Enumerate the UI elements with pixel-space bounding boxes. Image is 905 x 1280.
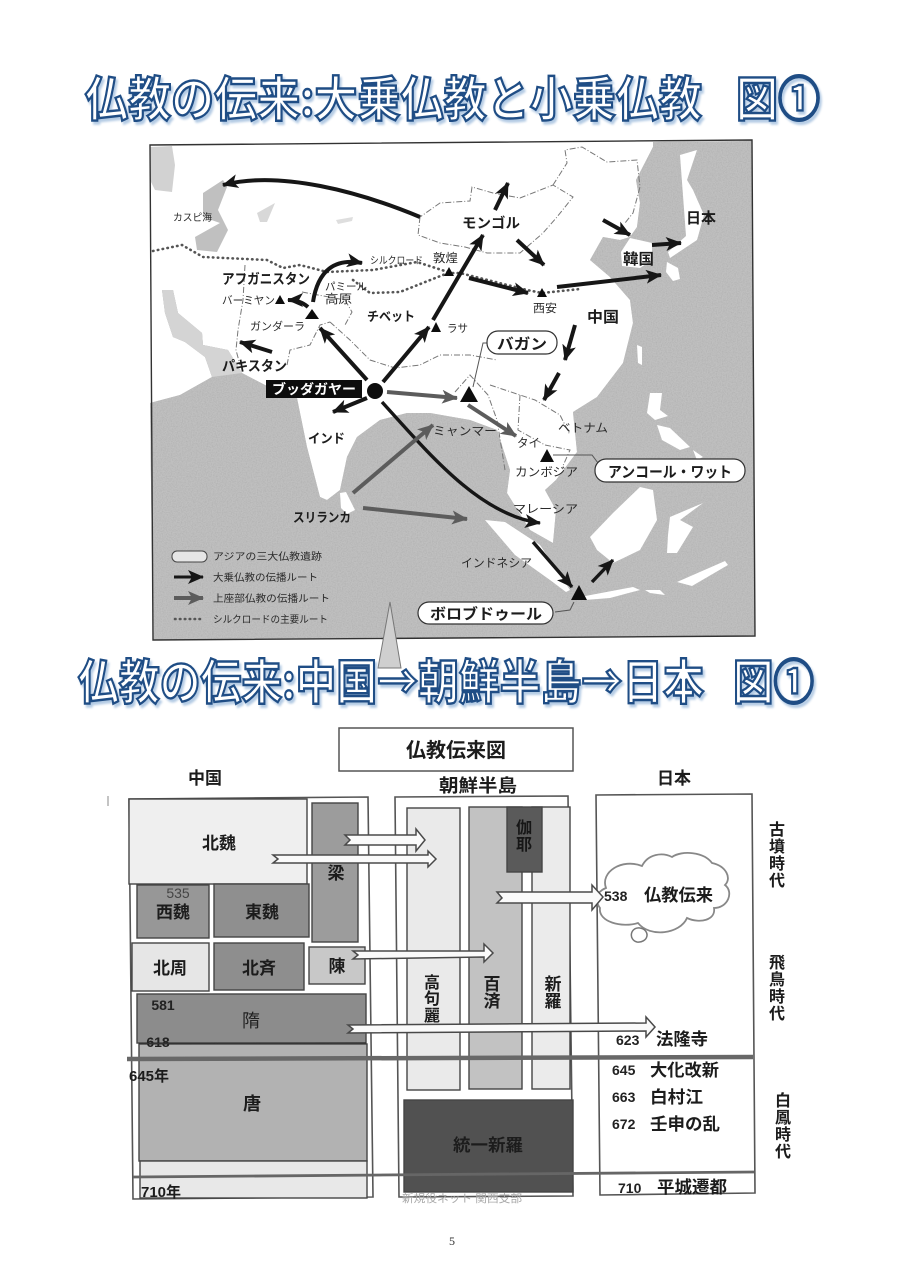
map: Bagan callout: バガン [497,333,547,354]
Japan: events: 白村江 [650,1088,703,1107]
cloud: arrival of Buddhism [597,853,729,942]
map: legend [172,548,330,626]
map: place labels: チベット [367,306,415,325]
panel: map of Buddhism's spread across Asia [150,140,755,640]
map: place labels: スリランカ [293,507,351,526]
Japan: events: 672 [612,1116,636,1132]
diagram title box [339,728,573,771]
map: place labels: 日本 [686,207,716,228]
Japan: events: 平城遷都 [657,1177,727,1197]
arrow: Liang to Goguryeo [345,829,425,851]
arrow: Chen to Baekje [353,944,493,962]
diagram title box: 仏教伝来図 [406,739,506,762]
era labels: 白鳳時代 [775,1092,791,1161]
China: dynasties: 西魏 [156,903,190,922]
map: place labels: 敦煌 [433,249,458,266]
title: top heading: 図① [736,60,820,130]
Japan: events: 大化改新 [650,1060,719,1080]
map: Mahayana route arrows [223,180,681,587]
map: site triangles [275,267,587,600]
map: Theravada route arrows [353,392,516,519]
map: place labels [173,207,716,571]
column headings [188,769,691,796]
cloud: arrival of Buddhism: 538 [604,888,628,904]
map: legend: 上座部仏教の伝播ルート [213,590,330,605]
map: Bodh Gaya marker [266,378,383,399]
map: place labels: 西安 [533,300,557,316]
era labels: 飛鳥時代 [769,954,785,1023]
China: dynasties: 535 [166,885,190,901]
map: legend: 大乗仏教の伝播ルート [213,569,318,584]
China: dynasties: 東魏 [245,903,279,922]
China: period years [129,1067,181,1201]
Korea: kingdoms: 百済 [484,975,500,1011]
map: place labels: ベトナム [558,419,608,436]
map: place labels: アフガニスタン [222,269,310,289]
Korea: kingdoms: 新羅 [544,975,562,1011]
map: place labels: バーミヤン [222,292,275,308]
map: place labels: 中国 [587,306,619,327]
map: place labels: シルクロード [370,252,423,267]
map: place labels: カスピ海 [173,209,212,224]
map: place labels: ガンダーラ [250,318,305,334]
China: dynasties: 唐 [243,1094,261,1114]
China: dynasties: 梁 [328,864,344,883]
map: place labels: ラサ [447,320,468,336]
column headings: 中国 [188,769,222,788]
China: dynasties: 北魏 [202,834,236,853]
era labels [769,821,791,1161]
Korea: kingdoms: 伽耶 [516,819,532,854]
arrow: Baekje to Japan [497,885,603,910]
title: top heading: 仏教の伝来:大乗仏教と小乗仏教 [85,60,702,130]
China: dynasties: 北斉 [242,958,276,978]
title: second heading: 仏教の伝来:中国→朝鮮半島→日本 [78,643,704,713]
China: dynasties: 陳 [328,957,346,976]
map: Angkor Wat callout [553,455,745,482]
map: place labels: インドネシア [461,554,532,571]
map: place labels: カンボジア [515,463,578,480]
Japan: events [612,1030,727,1197]
panel: Buddhism transmission diagram [108,728,791,1205]
map: place labels: モンゴル [462,213,520,233]
Korea: kingdoms: 高句麗 [424,973,440,1025]
era labels: 古墳時代 [769,821,785,890]
title: second heading: 図① [733,643,814,713]
China column frame [129,797,373,1199]
column headings: 日本 [657,769,691,788]
map: Angkor Wat callout: アンコール・ワット [608,461,732,482]
map: place labels: パキスタン [222,356,287,376]
map: place labels: インド [308,428,345,447]
Japan: events: 法隆寺 [656,1030,708,1049]
arrow: Sui to Horyuji [348,1017,655,1037]
map: country borders [236,147,640,470]
map: legend: シルクロードの主要ルート [213,611,328,626]
page number: 5 [449,1234,455,1248]
Korea column frame [395,796,573,1197]
timeline bands [127,1043,754,1177]
Korea: kingdoms: 統一新羅 [453,1136,523,1155]
Japan column frame [596,794,755,1195]
map: place labels: パミール [325,279,367,294]
Japan: events: 623 [616,1032,640,1048]
column headings: 朝鮮半島 [439,776,517,796]
China: dynasties: 618 [146,1034,170,1050]
Korea: kingdoms [404,807,573,1192]
map: Bagan callout [473,331,557,387]
China: period years: 645年 [129,1067,169,1085]
map: place labels: 高原 [325,290,352,307]
China: period years: 710年 [141,1183,181,1201]
Japan: events: 710 [618,1180,642,1196]
Japan: events: 663 [612,1089,636,1105]
China: dynasties: 隋 [242,1007,260,1033]
map: Bodh Gaya marker: ブッダガヤー [272,378,356,398]
China: dynasties [129,799,367,1198]
map: Borobudur callout: ボロブドゥール [430,603,542,624]
callout pointer triangle [378,602,401,668]
Japan: events: 645 [612,1062,636,1078]
map: silk road dotted routes [153,245,580,293]
map: place labels: 韓国 [623,248,654,269]
China: dynasties: 581 [151,997,175,1013]
arrow: Northern Wei to Goguryeo [273,851,436,867]
map: sea and lakes [150,141,755,640]
cloud: arrival of Buddhism: 仏教伝来 [644,886,713,905]
map: islands and peninsulas [340,150,728,600]
map: legend: アジアの三大仏教遺跡 [213,548,322,563]
China: dynasties: 北周 [153,959,187,978]
map: place labels: マレーシア [513,500,578,517]
watermark credit: 新規役ネット 関西支部 [402,1191,522,1205]
map: Borobudur callout [418,602,574,624]
map: place labels: タイ [517,434,540,451]
Japan: events: 壬申の乱 [650,1114,720,1134]
map: place labels: ミャンマー [433,422,497,439]
